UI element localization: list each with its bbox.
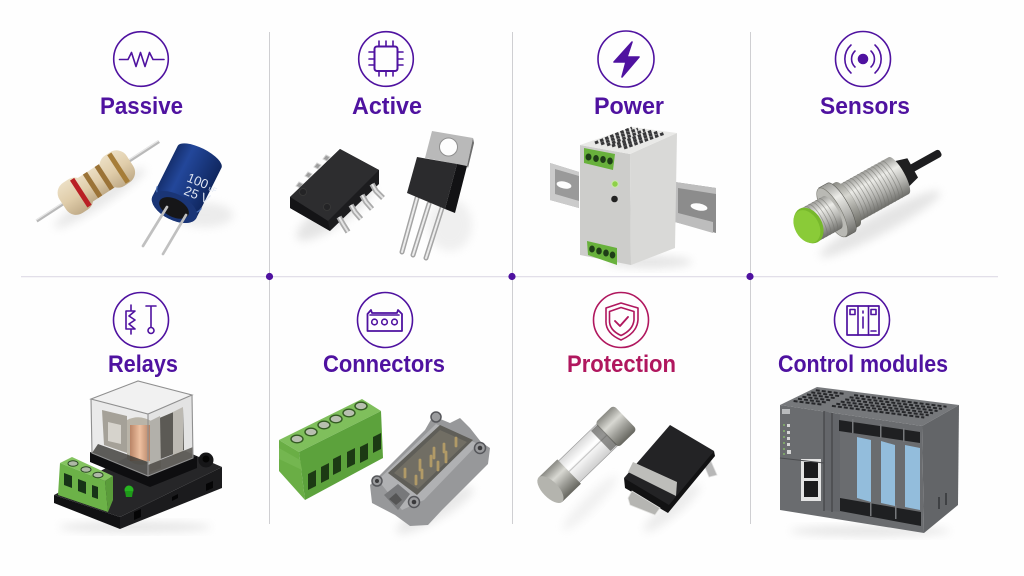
- icon: resistor symbol: [114, 32, 168, 86]
- icon: relay symbol: [114, 292, 168, 348]
- photo: capacitor: 25 V: [182, 183, 213, 207]
- photo: grey heavy-duty connector: [370, 412, 490, 541]
- top vents: [794, 390, 946, 418]
- terminal strips: [839, 420, 921, 526]
- photo: capacitor: 100: [185, 170, 211, 192]
- panel: control modules: [778, 292, 959, 536]
- panel: connectors: [279, 292, 490, 541]
- photo: proximity sensor: [783, 128, 954, 265]
- panel: protection: [533, 292, 717, 537]
- heading: Passive: Passive: [100, 93, 183, 120]
- blue module panels: [857, 437, 920, 510]
- vent grid: [595, 128, 665, 148]
- icon: connector block: [358, 292, 412, 348]
- photo: capacitor: [143, 138, 233, 254]
- bottom terminal: [587, 241, 617, 265]
- photo: relay on socket: [54, 381, 222, 532]
- photo: resistor: [27, 127, 169, 236]
- top terminal: [584, 148, 615, 170]
- panel: sensors: [783, 32, 954, 265]
- heading: Protection: Protection: [567, 351, 676, 378]
- photo: capacitor: uF: [207, 185, 217, 195]
- photo: TO-220 transistor: [402, 131, 474, 258]
- heading: Connectors: Connectors: [323, 351, 445, 378]
- photo: SOIC chip: [290, 149, 383, 249]
- icon: lightning bolt: [598, 31, 654, 87]
- panel: passive: [27, 32, 233, 254]
- ethernet ports: [801, 459, 821, 501]
- relay cube: [90, 452, 197, 487]
- heading: Power: Power: [594, 93, 664, 120]
- panel: active: [290, 32, 474, 258]
- heading: Active: Active: [352, 93, 422, 120]
- socket base: [54, 440, 222, 517]
- photo: green terminal block: [279, 399, 383, 500]
- icon: shield with check: [594, 292, 648, 348]
- icon: signal waves: [836, 32, 890, 86]
- heading: Control modules: Control modules: [778, 351, 948, 378]
- photo: PLC: [780, 387, 959, 536]
- photo: glass fuse: [533, 405, 637, 535]
- green terminal: [60, 457, 113, 481]
- photo: DIN rail power supply: [550, 127, 716, 268]
- icon: PLC modules: [834, 292, 890, 348]
- panel: power: [550, 31, 716, 268]
- heading: Relays: Relays: [108, 351, 178, 378]
- photo: SMD diode: [624, 425, 717, 537]
- heading: Sensors: Sensors: [820, 93, 910, 120]
- status LEDs: [783, 424, 785, 455]
- icon: microchip: [359, 32, 413, 86]
- panel: relays: [54, 292, 222, 532]
- DIN rail: [550, 163, 716, 233]
